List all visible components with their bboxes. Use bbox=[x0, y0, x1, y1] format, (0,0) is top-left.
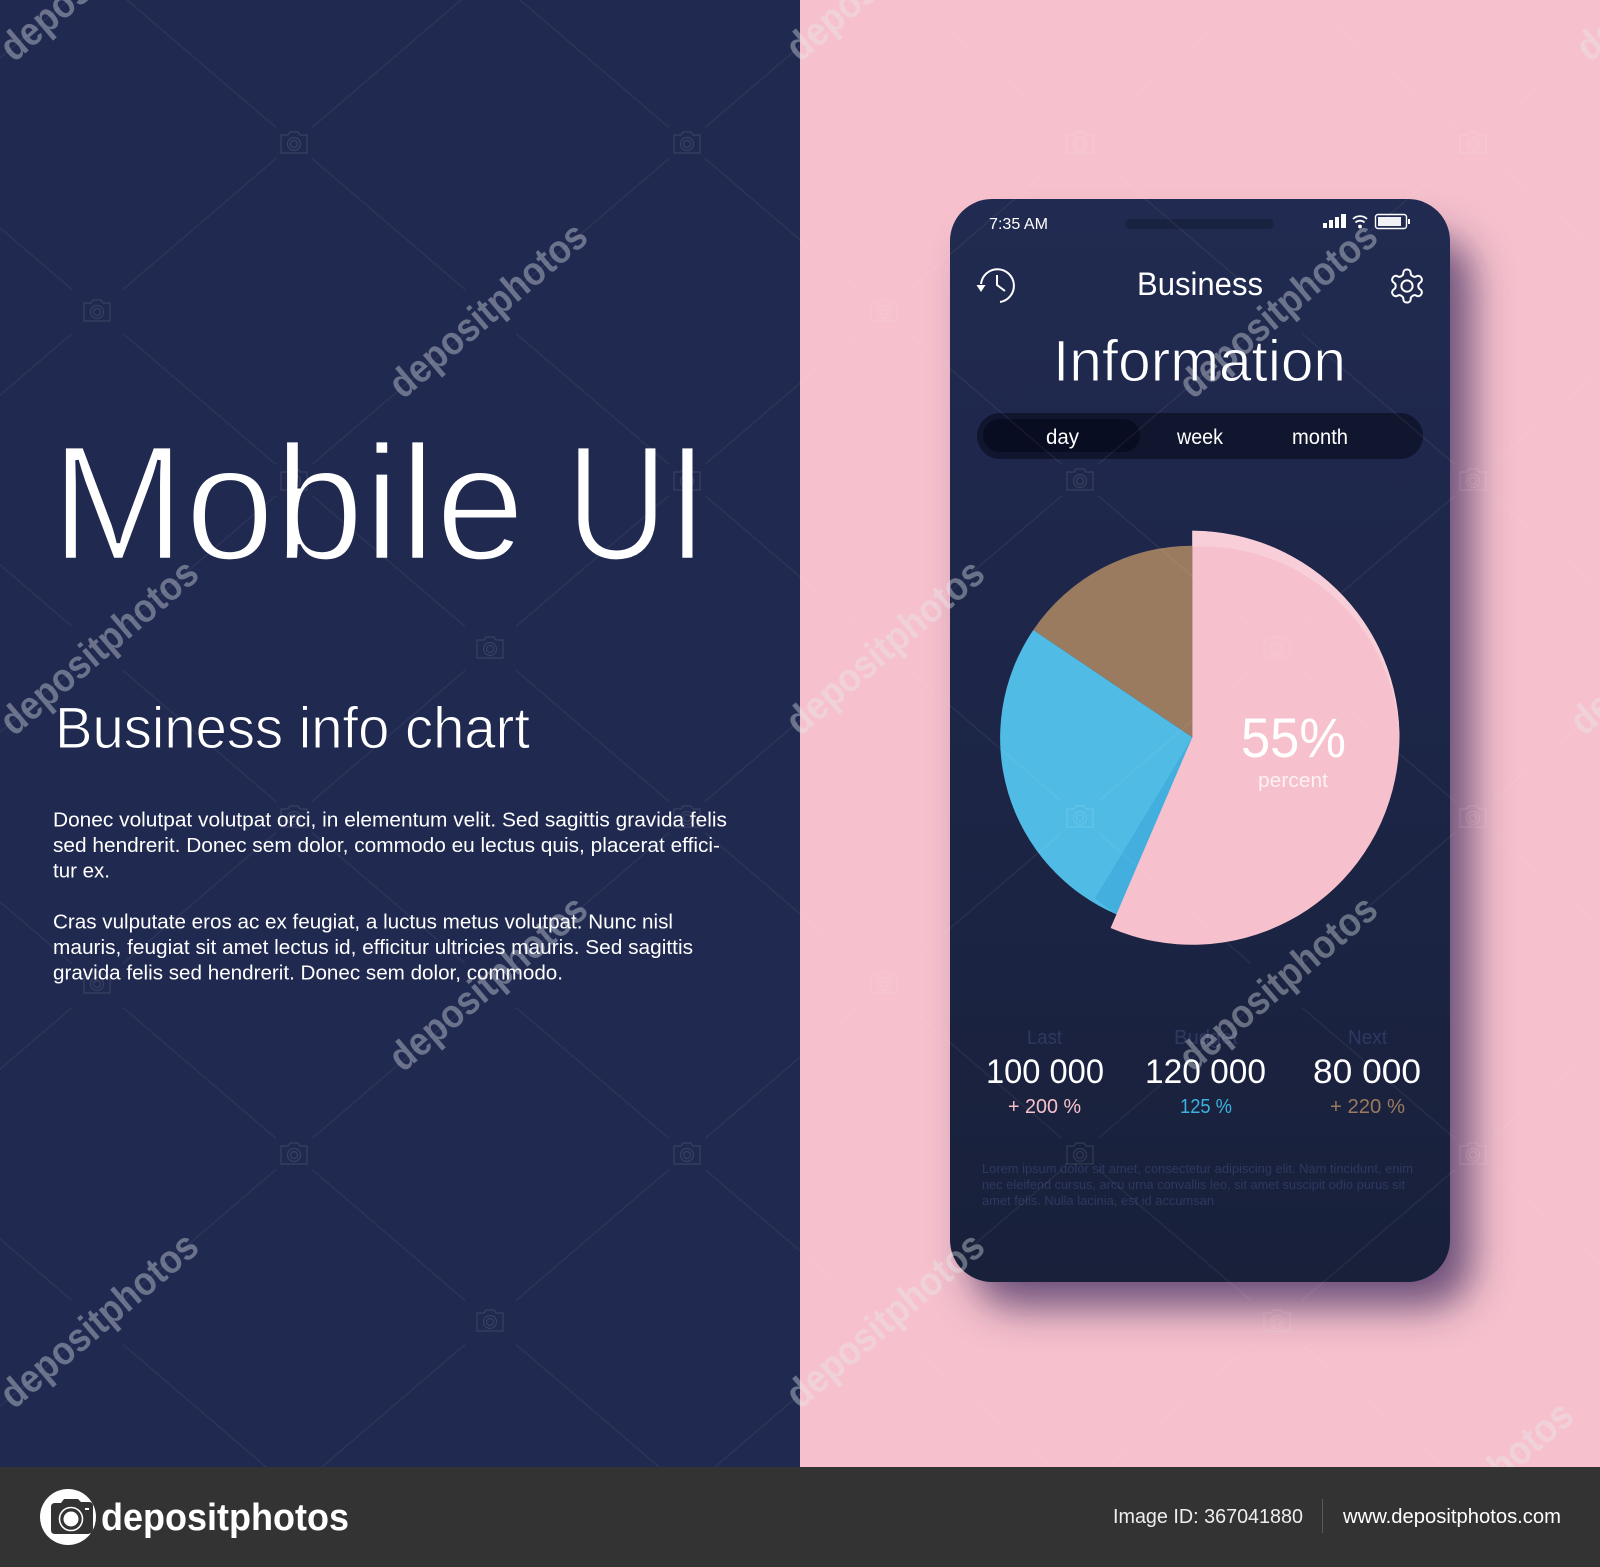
footer text: image id: Image ID: 367041880 bbox=[1113, 1506, 1303, 1528]
footer divider bbox=[1322, 1499, 1323, 1533]
text block: first paragraph bbox=[53, 808, 727, 882]
pie label: percent: percent bbox=[1258, 770, 1328, 792]
icon: history clock bbox=[976, 269, 1014, 302]
icon: battery bbox=[1376, 214, 1410, 228]
header: Business: Business bbox=[1137, 266, 1263, 302]
pie highlight bbox=[1192, 531, 1399, 752]
pie label: 55%: 55% bbox=[1241, 706, 1346, 769]
watermark: diagonal depositphotos text: depositphotos bbox=[1170, 214, 1386, 407]
footer text: website: www.depositphotos.com bbox=[1342, 1506, 1561, 1528]
text block: lorem ipsum note bbox=[982, 1162, 1413, 1208]
stat: Last: Last bbox=[1027, 1027, 1062, 1049]
text block: first paragraph: Donec volutpat volutpat orci, in elementum velit. Sed sagittis gravida felis bbox=[53, 808, 727, 832]
stat: Budget: 125 % bbox=[1180, 1096, 1232, 1118]
pie slice: blue bbox=[1000, 630, 1192, 915]
subtitle: Business info chart: Business info chart bbox=[55, 696, 530, 761]
segmented tabs: day week month: month bbox=[1292, 426, 1348, 449]
stat: Budget: 120 000 bbox=[1145, 1053, 1266, 1091]
text block: lorem ipsum note: amet felis. Nulla lacinia, est id accumsan bbox=[982, 1194, 1214, 1208]
pie slice: pink 55 percent bbox=[1111, 531, 1399, 945]
watermark: diagonal depositphotos text: depositphotos bbox=[380, 887, 596, 1080]
watermark: diagonal depositphotos text: depositphotos bbox=[1170, 887, 1386, 1080]
watermark: offset camera marks bbox=[84, 300, 1290, 1331]
text block: first paragraph: sed hendrerit. Donec sem dolor, commodo eu lectus quis, placerat effici- bbox=[53, 834, 720, 857]
icon: signal bars bbox=[1323, 214, 1346, 228]
watermark: diagonal depositphotos text: depositphotos bbox=[777, 1224, 993, 1417]
stat: Last: + 200 % bbox=[1008, 1096, 1081, 1118]
stat: Next: Next bbox=[1348, 1027, 1387, 1049]
stat: Next bbox=[1313, 1027, 1421, 1118]
panel: footer bar bbox=[0, 1467, 1600, 1567]
pie slice: darker blue wedge bbox=[1095, 737, 1192, 915]
panel: navy left background bbox=[0, 0, 800, 1467]
text block: second paragraph bbox=[53, 910, 693, 984]
text block: second paragraph: gravida felis sed hendrerit. Donec sem dolor, commodo. bbox=[53, 962, 563, 984]
icon: settings gear bbox=[1392, 270, 1422, 302]
segmented tabs: day week month: day bbox=[1046, 426, 1079, 449]
pie chart bbox=[1000, 531, 1399, 945]
watermark: diagonal depositphotos text: depositphotos bbox=[380, 214, 596, 407]
title: Mobile UI: Mobile bbox=[51, 412, 525, 594]
logo text: depositphotos: depositphotos bbox=[101, 1497, 349, 1539]
stat: Budget bbox=[1145, 1027, 1266, 1118]
pie slice: brown bbox=[1033, 546, 1192, 737]
segmented tabs: day week month bbox=[977, 413, 1423, 459]
text block: first paragraph: tur ex. bbox=[53, 860, 110, 882]
icon: wifi bbox=[1353, 216, 1367, 228]
text block: lorem ipsum note: nec eleifend cursus, arcu urna convallis leo, sit amet suscipit odio purus sit bbox=[982, 1178, 1406, 1192]
text block: second paragraph: mauris, feugiat sit amet lectus id, efficitur ultricies mauris. Sed sagittis bbox=[53, 936, 693, 959]
stat: Last bbox=[986, 1027, 1104, 1118]
phone speaker notch bbox=[1125, 219, 1274, 229]
title: Mobile UI: UI bbox=[566, 412, 707, 594]
segmented tabs: day week month: week bbox=[1176, 426, 1223, 449]
panel: pink right background bbox=[800, 0, 1600, 1467]
stat: Budget: Budget bbox=[1174, 1027, 1238, 1049]
watermark: diagonal depositphotos text: depositphotos bbox=[777, 551, 993, 744]
stat: Next: 80 000 bbox=[1313, 1053, 1421, 1091]
panel: phone mockup bbox=[950, 199, 1450, 1282]
text block: lorem ipsum note: Lorem ipsum dolor sit amet, consectetur adipiscing elit. Nam tincidunt, enim bbox=[982, 1162, 1413, 1176]
heading: Information: Information bbox=[1053, 329, 1346, 394]
text block: second paragraph: Cras vulputate eros ac ex feugiat, a luctus metus volutpat. Nunc nisl bbox=[53, 910, 673, 934]
phone body bbox=[950, 199, 1450, 1282]
status bar time: 7:35 AM bbox=[989, 216, 1048, 233]
stat: Next: + 220 % bbox=[1330, 1096, 1405, 1118]
icon: depositphotos camera logo bbox=[40, 1489, 96, 1545]
stat: Last: 100 000 bbox=[986, 1053, 1104, 1091]
phone drop shadow bbox=[972, 236, 1472, 1307]
